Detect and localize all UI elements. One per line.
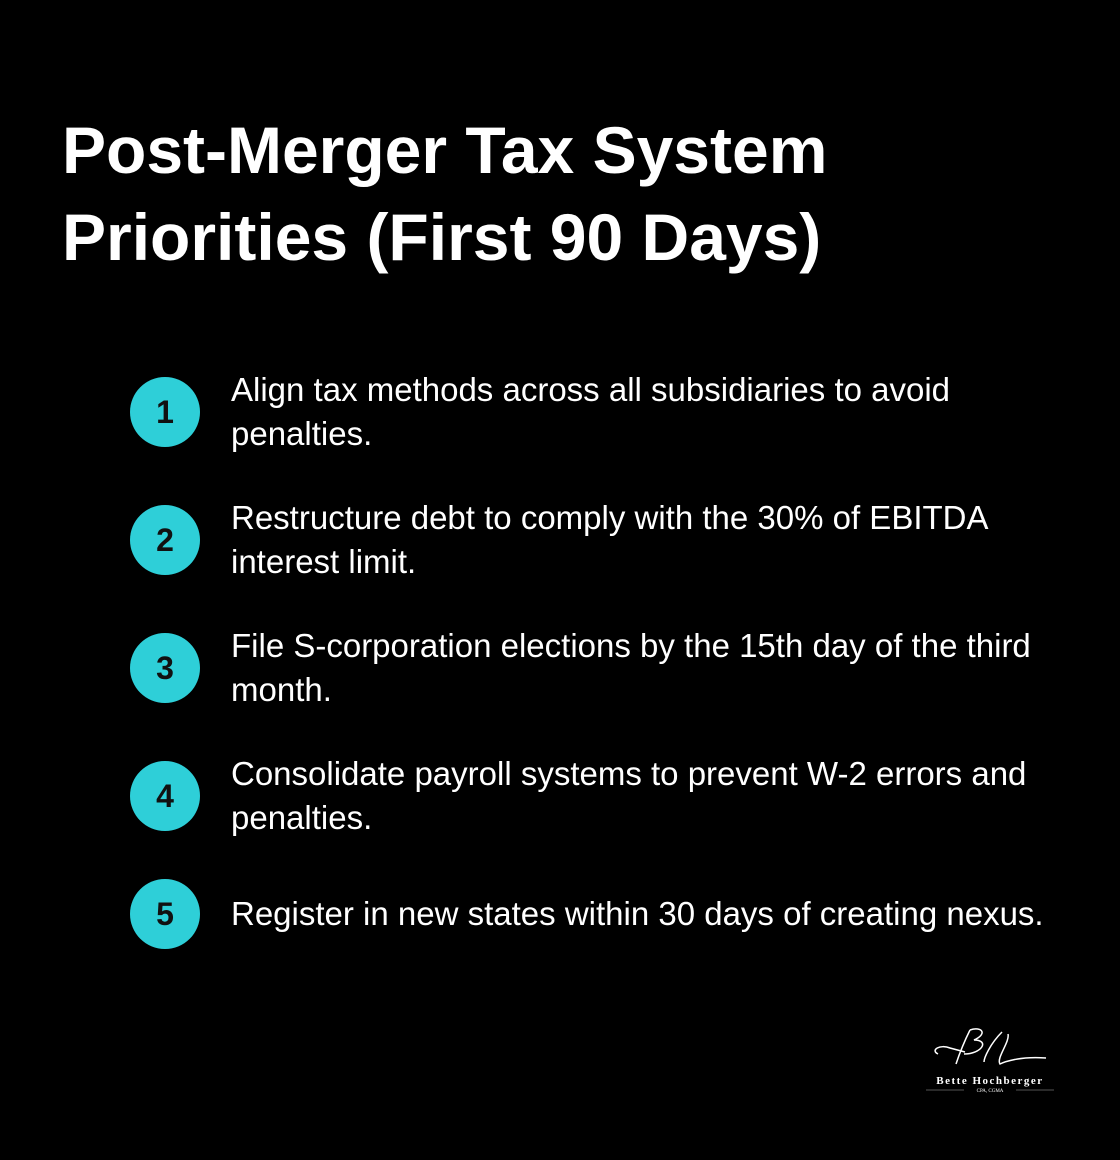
text 1: Align tax methods across all subsidiaries to avoid [231, 371, 950, 408]
text 4 [231, 755, 1026, 836]
text 4: penalties. [231, 799, 372, 836]
text 2: Restructure debt to comply with the 30% of EBITDA [231, 499, 989, 536]
badge 1 [130, 377, 200, 447]
item 3 [130, 627, 1031, 708]
title: Priorities (First 90 Days) [62, 200, 821, 274]
item 1 [130, 371, 950, 452]
text 1: penalties. [231, 415, 372, 452]
logo: CPA, CGMA [977, 1089, 1004, 1094]
badge 2: 2 [156, 522, 174, 558]
badge 4: 4 [156, 778, 174, 814]
badge 3: 3 [156, 650, 174, 686]
badge 5: 5 [156, 896, 174, 932]
badge 1: 1 [156, 394, 174, 430]
badge 3 [130, 633, 200, 703]
item 4 [130, 755, 1026, 836]
text 3: File S-corporation elections by the 15th day of the third [231, 627, 1031, 664]
text 4: Consolidate payroll systems to prevent W-2 errors and [231, 755, 1026, 792]
text 2: interest limit. [231, 543, 416, 580]
logo [926, 1028, 1054, 1094]
text 3: month. [231, 671, 332, 708]
item 2 [130, 499, 989, 580]
badge 4 [130, 761, 200, 831]
title: Post-Merger Tax System [62, 113, 827, 187]
text 2 [231, 499, 989, 580]
text 1 [231, 371, 950, 452]
text 3 [231, 627, 1031, 708]
badge 2 [130, 505, 200, 575]
text 5: Register in new states within 30 days of creating nexus. [231, 895, 1044, 932]
badge 5 [130, 879, 200, 949]
title [62, 113, 827, 274]
item 5 [130, 879, 1044, 949]
logo: Bette Hochberger [936, 1075, 1044, 1087]
